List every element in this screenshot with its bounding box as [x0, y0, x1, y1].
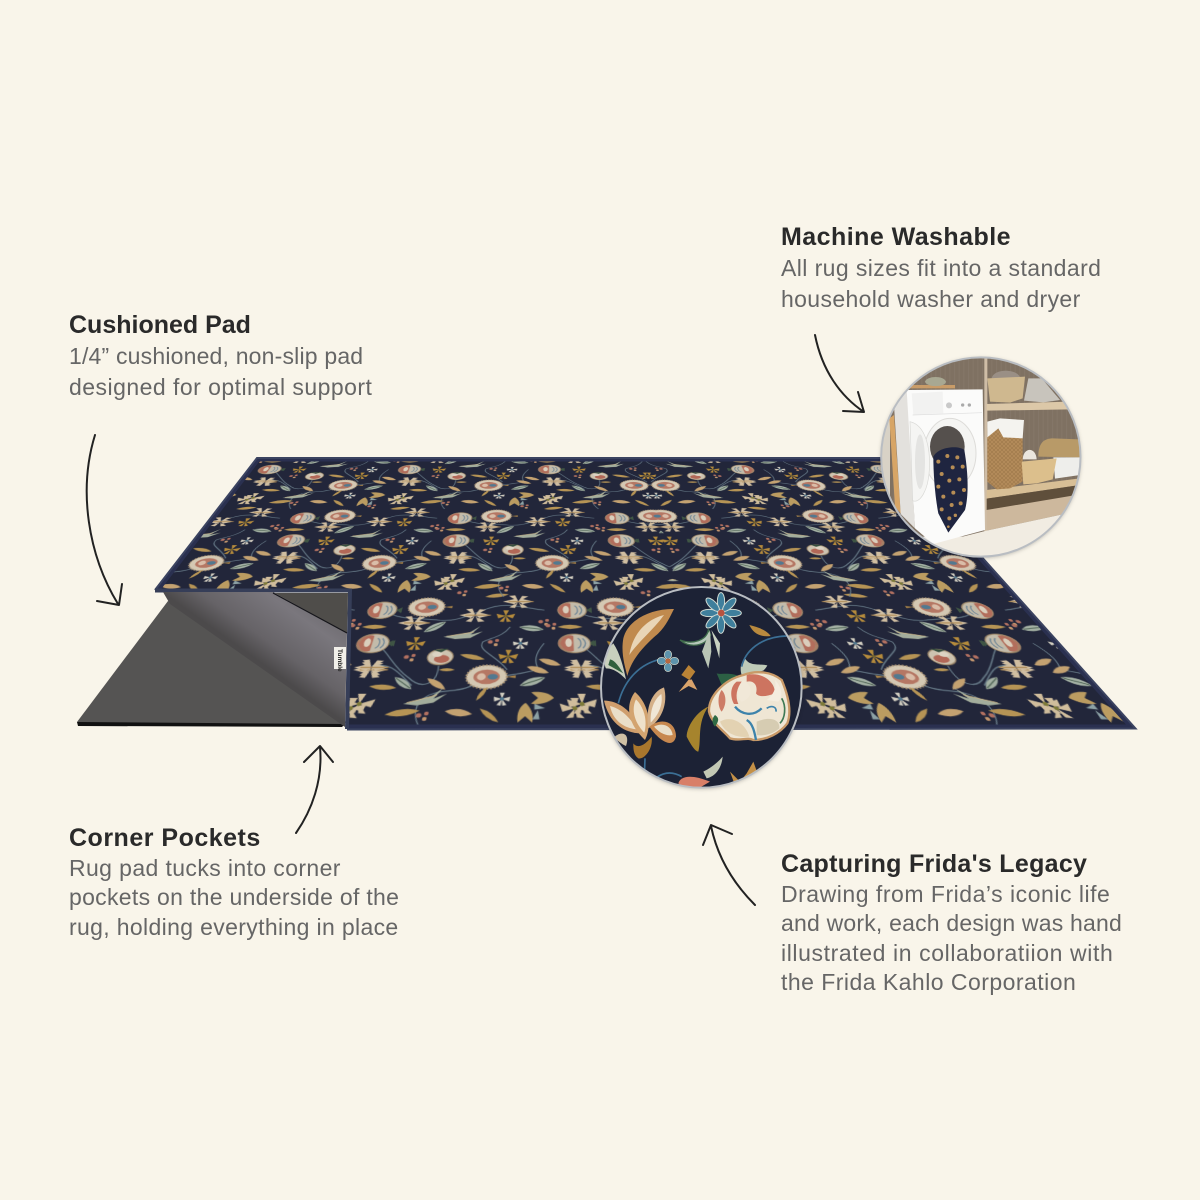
- wood post: [889, 415, 901, 513]
- callout: cushioned pad: [69, 311, 372, 400]
- callout: capturing Frida's legacy: [781, 850, 1122, 995]
- callout: cushioned pad: Cushioned Pad: [69, 311, 251, 339]
- stem and small blue flower: [618, 650, 697, 703]
- callout: machine washable: [781, 223, 1101, 312]
- brand label: Tumble: [336, 649, 343, 672]
- peony flower: [687, 625, 789, 752]
- callout: corner pockets: pockets on the underside of the: [69, 884, 399, 910]
- callout: capturing Frida's legacy: the Frida Kahlo Corporation: [781, 969, 1076, 995]
- callout: capturing Frida's legacy: illustrated in collaboratiion with: [781, 940, 1113, 966]
- folded rug underside: [163, 592, 347, 727]
- callout: capturing Frida's legacy: Capturing Frida's Legacy: [781, 850, 1087, 878]
- callout: corner pockets: Corner Pockets: [69, 824, 261, 852]
- callout: capturing Frida's legacy: and work, each design was hand: [781, 910, 1122, 936]
- brand label: [334, 647, 346, 672]
- baskets: [987, 371, 1080, 489]
- wall and shelving: [882, 358, 1080, 537]
- circle inset: rug detail: [599, 586, 804, 791]
- washing machine: [894, 389, 985, 544]
- callout: corner pockets: [69, 824, 399, 940]
- top blue flower: [680, 593, 741, 668]
- lower sprigs: [657, 756, 756, 787]
- callout: cushioned pad: 1/4” cushioned, non-slip pad: [69, 343, 363, 369]
- rug with floral pattern: [158, 459, 1134, 728]
- vase: [925, 377, 946, 386]
- iris flower: [604, 687, 676, 777]
- callout: cushioned pad: designed for optimal support: [69, 374, 372, 400]
- callout: capturing Frida's legacy: Drawing from Frida’s iconic life: [781, 881, 1110, 907]
- top-left leaf: [605, 609, 674, 679]
- callout: machine washable: All rug sizes fit into a standard: [781, 255, 1101, 281]
- tucked pad wedge: [273, 593, 348, 633]
- circle inset: washing machine: [878, 356, 1083, 560]
- callout: corner pockets: rug, holding everything in place: [69, 914, 399, 940]
- callout: machine washable: household washer and dryer: [781, 286, 1081, 312]
- callout: corner pockets: Rug pad tucks into corner: [69, 855, 341, 881]
- callout: machine washable: Machine Washable: [781, 223, 1011, 251]
